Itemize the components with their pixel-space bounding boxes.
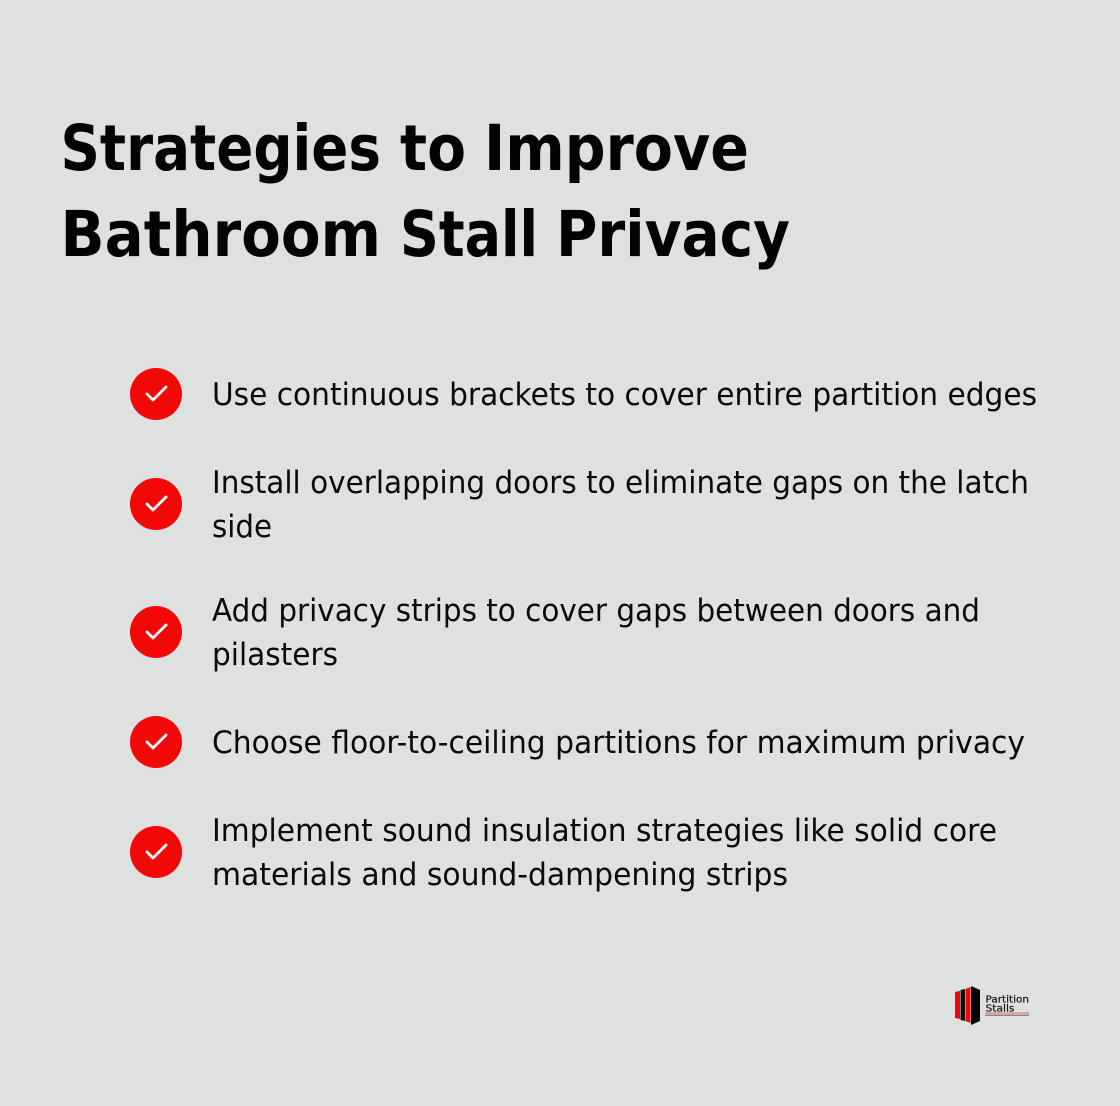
item 5: Implement sound insulation strategies like solid core xyxy=(212,813,997,849)
logo: Partition Stalls xyxy=(955,986,1029,1025)
title: Improve xyxy=(484,112,749,185)
item 3: Add privacy strips to cover gaps between doors and xyxy=(212,593,980,629)
item 5: materials and sound-dampening strips xyxy=(212,857,788,893)
item 4 xyxy=(130,716,1025,768)
logo: Partition Stalls: Stalls xyxy=(986,1004,1014,1014)
logo: Partition Stalls: Partition xyxy=(986,994,1029,1006)
title: to xyxy=(400,112,466,185)
title: Strategies xyxy=(60,112,381,185)
item 2: side xyxy=(212,509,272,545)
item 3: pilasters xyxy=(212,637,338,673)
item 2: Install overlapping doors to eliminate gaps on the latch xyxy=(212,465,1029,501)
title: Privacy xyxy=(556,198,790,271)
title: Bathroom xyxy=(60,198,381,271)
item 2 xyxy=(130,465,1029,545)
title: Stall xyxy=(400,198,538,271)
title xyxy=(60,112,790,271)
item 4: Choose floor-to-ceiling partitions for maximum privacy xyxy=(212,725,1025,761)
item 1: Use continuous brackets to cover entire partition edges xyxy=(212,377,1037,413)
item 5 xyxy=(130,813,997,893)
item 3 xyxy=(130,593,980,673)
checklist xyxy=(130,368,1037,893)
item 1 xyxy=(130,368,1037,420)
